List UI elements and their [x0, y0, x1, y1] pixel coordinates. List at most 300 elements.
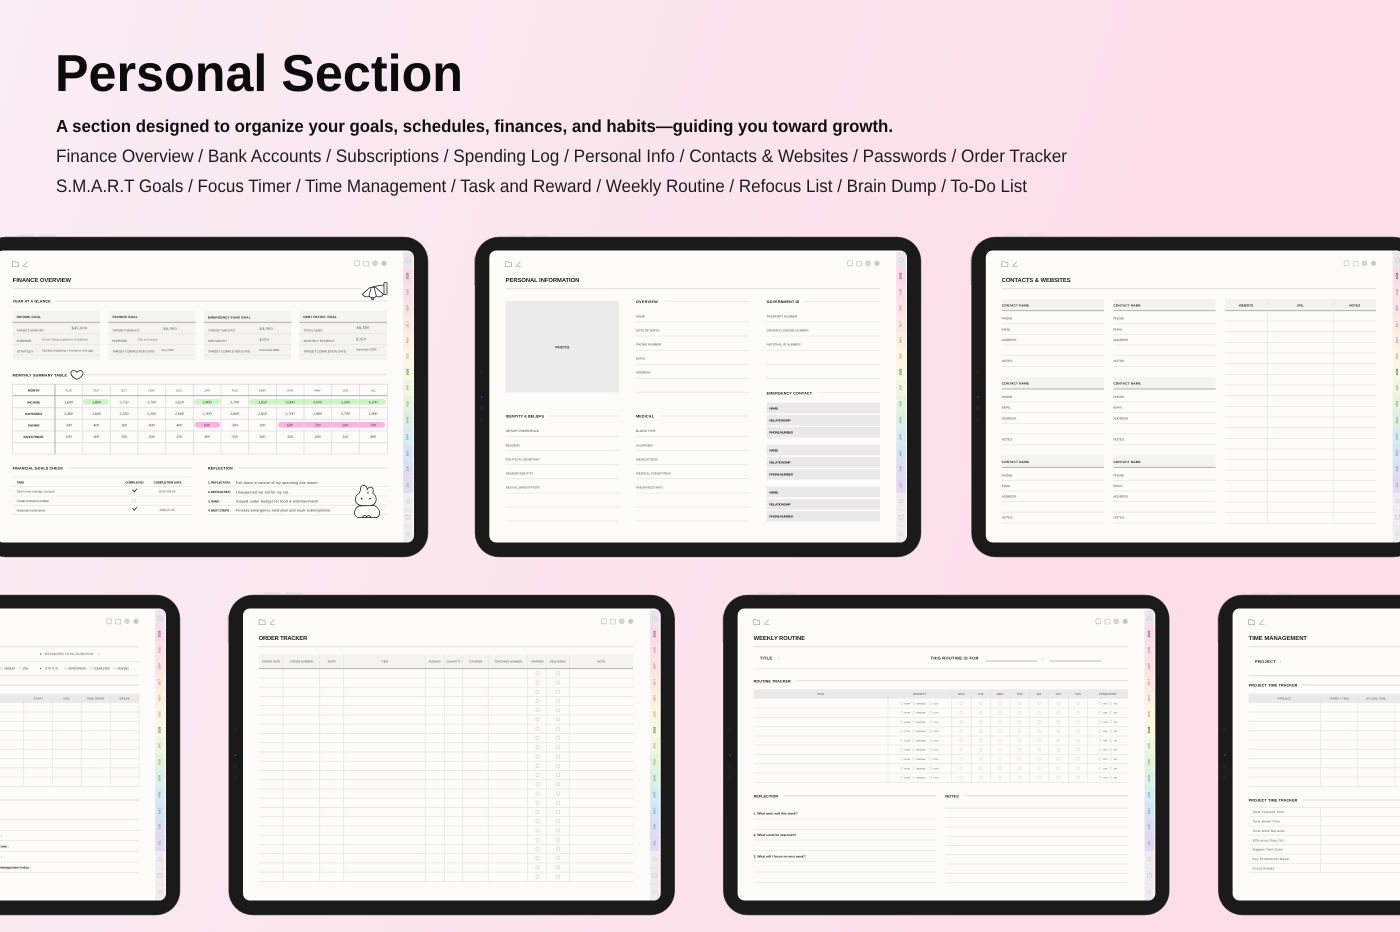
monthly summary table: 3,700: [147, 400, 156, 404]
monthly summary table: MONTH: [28, 389, 40, 393]
contact card 3: EMAIL: [1002, 406, 1011, 410]
routine tracker table: SUN: [1075, 692, 1081, 696]
contact card 6: CONTACT NAME: [1113, 460, 1141, 464]
card: income goal: Cover living expenses & hobbies: [42, 338, 88, 341]
monthly summary table: 350: [287, 434, 293, 439]
card: savings goal: SAVINGS GOAL: [112, 315, 138, 319]
routine tracker table: MON: [958, 692, 965, 696]
sidebar tab labels: MAR: [652, 774, 656, 781]
card: debt payoff goal: [299, 311, 387, 360]
contact card 5: [1002, 456, 1104, 523]
weekly routine page content: [754, 635, 1130, 883]
card: savings goal: $6,000: [163, 326, 177, 331]
contacts page content: [1002, 277, 1376, 523]
sidebar tab labels: NOV: [899, 337, 903, 343]
section: emergency contact: RELATIONSHIP: [769, 461, 791, 464]
reflection list: Stayed under budget for food & entertainment!: [236, 500, 318, 504]
order table: COURIER: [469, 660, 482, 663]
monthly summary table: 300: [259, 423, 265, 428]
device frame and sidebar tabs: [970, 235, 1400, 557]
monthly summary table: 300: [66, 423, 72, 428]
section heading: routine tracker: ROUTINE TRACKER: [754, 679, 791, 683]
section: emergency contact: [767, 391, 880, 522]
sidebar tab labels: APR: [1395, 433, 1399, 440]
sidebar tab labels: 2026: [899, 368, 903, 375]
summary metrics table: Total Focused Time: [1253, 810, 1284, 814]
routine tracker table: YES: [1103, 703, 1108, 705]
reflection list: Felt more in control of my spending this month.: [236, 481, 319, 485]
contact card 2: ADDRESS: [1113, 338, 1128, 342]
card: emergency fund goal: TARGET AMOUNT: [208, 329, 235, 332]
sidebar tab labels: FEB: [158, 759, 162, 765]
order table: ORDER NUMBER: [290, 660, 313, 663]
card: debt payoff goal: MONTHLY PAYMENT: [304, 339, 335, 343]
routine tracker table: TUE: [978, 692, 984, 696]
sidebar tab labels: OCT: [1147, 679, 1151, 685]
sidebar tab labels: FEB: [406, 401, 410, 407]
card: emergency fund goal: $4,000: [259, 326, 273, 331]
sidebar tab labels: JUL: [158, 840, 162, 846]
sidebar tab labels: JUN: [652, 824, 656, 830]
section heading: project time tracker summary: PROJECT TIME TRACKER: [1249, 798, 1297, 802]
sidebar tab labels: JUL: [1395, 482, 1399, 488]
contact card 2: EMAIL: [1113, 328, 1123, 331]
monthly summary table: 300: [232, 423, 238, 428]
order tracker page content: [259, 635, 633, 882]
monthly summary table: 200: [66, 434, 72, 439]
routine tracker table: NO: [1114, 721, 1117, 724]
device frame and sidebar tabs: [474, 235, 921, 557]
section: government id: GOVERNMENT ID: [767, 300, 799, 304]
routine tracker table: NO: [1114, 703, 1117, 705]
routine tracker table: NO: [1114, 749, 1117, 751]
section: emergency contact: NAME: [769, 491, 778, 494]
sidebar tab labels: DEC: [899, 352, 903, 359]
time log table: BREAK: [120, 697, 130, 700]
routine tracker table: MEDIUM: [917, 749, 925, 751]
monthly summary table: 3,850: [258, 400, 267, 404]
card: savings goal: July 2026: [161, 348, 174, 352]
order table: SHOP: [328, 660, 336, 663]
project field: PROJECT: [1255, 659, 1276, 664]
section: identity and beliefs: IDENTITY & BELIEFS: [506, 415, 544, 419]
routine tracker table: HIGH: [905, 703, 910, 705]
contact card 4: CONTACT NAME: [1113, 382, 1141, 386]
project time table: ACTUAL TIME: [1366, 697, 1386, 700]
section: reflection: 1. What went well this week?: [754, 812, 798, 816]
section heading: reflection: REFLECTION: [208, 467, 233, 471]
section: government id: [767, 300, 880, 378]
sidebar tab labels: DEC: [158, 710, 162, 717]
monthly summary table: 400: [315, 434, 321, 439]
monthly summary table: 400: [370, 434, 376, 439]
sidebar tab labels: OCT: [1395, 321, 1399, 327]
sidebar tab labels: OCT: [158, 679, 162, 685]
device frame and sidebar tabs: [0, 593, 180, 915]
order table: [259, 654, 633, 882]
monthly summary table: 2,400: [64, 411, 73, 416]
sidebar tab labels: SEP: [899, 305, 903, 311]
monthly summary table: 300: [93, 434, 99, 439]
section: identity and beliefs: SEXUAL ORIENTATION: [506, 486, 540, 490]
monthly summary table: JUN: [342, 389, 348, 392]
goals check table: 2025-08-03: [159, 490, 175, 493]
reflection list: 2. DIFFICULTIES :: [208, 490, 231, 494]
routine tracker table: YES: [1103, 749, 1108, 751]
monthly summary table: 600: [287, 423, 293, 428]
contact card 1: [1002, 299, 1104, 366]
summary metrics table: Total Work Duration: [1253, 829, 1285, 833]
reflection list: [208, 481, 387, 515]
sidebar tab labels: MAY: [1147, 808, 1151, 814]
sidebar tab labels: NOV: [652, 695, 656, 701]
routine tracker table: HIGH: [905, 712, 910, 714]
contact card 6: NOTES: [1113, 516, 1124, 520]
sidebar tab labels: MAY: [652, 808, 656, 814]
monthly summary table: APR: [287, 389, 293, 392]
section: reflection: 3. What will I focus on next week?: [754, 855, 806, 858]
monthly summary table: 2,600: [175, 411, 184, 416]
order table: SHIPPED: [531, 660, 544, 663]
sidebar tab labels: AUG: [652, 646, 656, 653]
priority and status options: LOW: [23, 667, 28, 670]
priority and status options: [0, 667, 139, 685]
section heading: project time tracker: PROJECT TIME TRACKER: [1249, 684, 1297, 688]
time log table: [0, 694, 139, 786]
routine tracker table: MEDIUM: [917, 758, 925, 761]
contact card 5: PHONE: [1002, 474, 1012, 477]
contact card 1: PHONE: [1002, 317, 1012, 321]
routine tracker table: HIGH: [905, 730, 910, 733]
card: income goal: $45,000: [72, 326, 87, 331]
sidebar tab labels: [899, 272, 903, 488]
card: emergency fund goal: EMERGENCY FUND GOAL: [208, 316, 251, 319]
monthly summary table: JAN: [204, 389, 210, 392]
monthly summary table: SAVING: [28, 424, 40, 428]
section: medical: MEDICATIONS: [636, 458, 658, 461]
monthly summary table: 300: [121, 423, 127, 428]
routine tracker table: YES: [1103, 712, 1108, 714]
page heading: PERSONAL INFORMATION: [506, 277, 579, 283]
sidebar tab labels: DEC: [1147, 710, 1151, 717]
device frame and sidebar tabs: [228, 593, 675, 915]
monthly summary table: 400: [176, 423, 182, 428]
section: emergency contact: RELATIONSHIP: [769, 503, 791, 506]
contact card 6: [1113, 456, 1216, 523]
sidebar tab labels: MAR: [406, 416, 410, 423]
routine tracker table: YES: [1103, 730, 1108, 733]
routine title and date range: THIS ROUTINE IS FOR: [931, 656, 978, 661]
goals check table: TASK: [17, 481, 24, 484]
order table: AMOUNT: [429, 660, 441, 663]
monthly summary table: 350: [232, 434, 238, 439]
routine tracker table: WED: [997, 692, 1003, 696]
contact card 3: [1002, 377, 1104, 445]
sidebar tab labels: JUN: [1395, 466, 1399, 472]
monthly summary table: FEB: [232, 389, 238, 392]
sidebar tab labels: DEC: [406, 352, 410, 359]
sidebar tab labels: [158, 630, 162, 846]
sidebar tab labels: OCT: [406, 321, 410, 327]
sidebar tab labels: AUG: [406, 288, 410, 295]
section heading: financial goals check: FINANCIAL GOALS CHECK: [13, 467, 63, 471]
websites table: [1225, 299, 1376, 523]
sidebar tab labels: 2025: [1395, 272, 1399, 279]
section: reflection: REFLECTION: [754, 794, 778, 798]
card: debt payoff goal: $8,500: [357, 325, 369, 330]
section: reflection: [754, 794, 936, 882]
monthly summary table: INCOME: [27, 401, 40, 404]
section: overview: ADDRESS: [636, 371, 651, 375]
reflection list: 4. NEXT STEPS :: [208, 509, 231, 512]
section: notes: NOTES: [945, 794, 959, 798]
contact card 5: ADDRESS: [1002, 495, 1016, 499]
sidebar tab labels: MAR: [1395, 416, 1399, 423]
sidebar tab labels: 2026: [406, 368, 410, 375]
contact card 4: NOTES: [1113, 438, 1124, 441]
monthly summary table: 3,650: [175, 400, 184, 404]
time log table: START: [34, 697, 43, 700]
sidebar tab labels: 2026: [158, 726, 162, 733]
page heading: CONTACTS & WEBSITES: [1002, 277, 1071, 283]
sidebar tab labels: JUL: [1147, 840, 1151, 846]
page heading: FINANCE OVERVIEW: [13, 277, 71, 283]
contact card 2: PHONE: [1113, 317, 1124, 321]
title: Personal Section: [55, 45, 463, 103]
section: notes: [945, 794, 1128, 883]
icon: wall lamp: [362, 283, 387, 300]
routine tracker table: NO: [1114, 768, 1117, 770]
section heading: monthly summary table: MONTHLY SUMMARY TABLE: [13, 373, 67, 377]
monthly summary table: 700: [315, 423, 321, 428]
project field: [1249, 659, 1400, 676]
section: emergency contact: PHONE NUMBER: [769, 473, 793, 476]
routine tracker table: MEDIUM: [917, 730, 925, 733]
sidebar tab labels: AUG: [158, 646, 162, 653]
project field: /: [1280, 660, 1281, 664]
sidebar tab labels: NOV: [1395, 337, 1399, 343]
sidebar tab labels: APR: [1147, 791, 1151, 798]
monthly summary table: JUL: [370, 389, 376, 392]
order table: NOTE: [597, 660, 605, 663]
project time table: TARGET TIME: [1329, 697, 1349, 700]
priority and status options: PENDING: [117, 667, 129, 670]
sidebar tab labels: MAY: [158, 808, 162, 814]
sidebar tab labels: MAY: [1395, 450, 1399, 456]
card: debt payoff goal: $350: [356, 337, 366, 342]
routine tracker table: NO: [1114, 740, 1117, 742]
sidebar tab labels: FEB: [1147, 759, 1151, 765]
card: savings goal: TARGET AMOUNT: [112, 329, 140, 332]
monthly summary table: NOV: [148, 389, 155, 392]
sidebar tab labels: JUL: [406, 482, 410, 488]
routine tracker table: [754, 689, 1130, 782]
section: emergency contact: PHONE NUMBER: [769, 431, 793, 434]
card: emergency fund goal: TARGET COMPLETION DATE: [208, 350, 250, 354]
sidebar tab labels: APR: [899, 433, 903, 440]
section: government id: DRIVER'S LICENSE NUMBER: [767, 329, 809, 333]
monthly summary table: 300: [259, 434, 265, 439]
section: medical: MEDICAL: [636, 415, 654, 419]
contact card 3: NOTES: [1002, 438, 1012, 441]
monthly summary table: 3,900: [285, 400, 294, 404]
contact card 3: PHONE: [1002, 395, 1012, 399]
monthly summary table: 350: [342, 434, 348, 439]
priority and status options: IN PROGRESS: [68, 667, 86, 670]
contact card 1: ADDRESS: [1002, 338, 1016, 342]
monthly summary table: AUG: [65, 389, 72, 392]
sidebar tab labels: JUN: [899, 466, 903, 472]
section: overview: PHONE NUMBER: [636, 343, 661, 347]
card: emergency fund goal: [204, 311, 291, 360]
goals check table: Open new savings account: [17, 490, 55, 493]
monthly summary table: 4,000: [313, 400, 322, 404]
time log table: END: [63, 697, 70, 700]
device frame: [1217, 593, 1400, 915]
section: overview: NAME: [636, 315, 645, 318]
contact card 2: CONTACT NAME: [1113, 304, 1141, 307]
estimated duration field: ESTIMATED TOTAL DURATION :: [45, 652, 95, 656]
routine tracker table: THU: [1017, 692, 1023, 696]
monthly summary table: DEC: [176, 389, 183, 392]
sidebar tab labels: FEB: [899, 401, 903, 407]
contact card 5: EMAIL: [1002, 484, 1011, 488]
contact card 1: CONTACT NAME: [1002, 304, 1029, 307]
priority and status options: STATUS:: [45, 667, 59, 670]
routine tracker table: PRIORITY: [913, 692, 926, 696]
routine tracker table: MEDIUM: [917, 703, 925, 705]
section: identity and beliefs: [506, 415, 619, 521]
sidebar tab labels: APR: [158, 791, 162, 798]
goals check table: COMPLETION DATE: [154, 481, 182, 484]
sidebar tab labels: 2026: [1395, 368, 1399, 375]
goals check table: 2025-07-26: [159, 508, 175, 512]
routine tracker table: TASK: [817, 692, 824, 696]
routine tracker table: LOW: [933, 758, 939, 761]
monthly summary table: 2,300: [202, 411, 211, 416]
card: debt payoff goal: September 2026: [356, 348, 377, 351]
routine tracker table: YES: [1103, 721, 1108, 724]
monthly summary table: [13, 384, 387, 454]
tablet: task planner, cropped at left: [0, 593, 180, 915]
summary metrics table: Key Productivity Boost: [1253, 857, 1289, 861]
monthly summary table: 2,600: [92, 411, 101, 416]
monthly summary table: 3,700: [230, 400, 239, 404]
monthly summary table: 3,600: [64, 400, 73, 404]
subtitle: A section designed to organize your goals, schedules, finances, and habits—guiding you toward growth.: [56, 116, 893, 136]
project time table: [1249, 694, 1400, 786]
time log table: TIME SPENT: [87, 697, 105, 700]
routine tracker table: MEDIUM: [917, 768, 925, 770]
project time table: PROJECT: [1278, 697, 1292, 700]
card: income goal: INCOME GOAL: [17, 315, 41, 319]
page heading: WEEKLY ROUTINE: [754, 635, 805, 641]
section: medical: INSURANCE INFO: [636, 486, 663, 490]
tablet: time management, cropped at right: [1217, 593, 1400, 915]
finance overview page content: [13, 277, 387, 518]
time management page content: [1249, 635, 1400, 873]
routine tracker table: COMPLETED: [1099, 692, 1116, 696]
contact card 5: CONTACT NAME: [1002, 460, 1029, 464]
tablet: contacts and websites: [970, 235, 1400, 557]
monthly summary table: 400: [149, 423, 155, 428]
sidebar tab labels: 2025: [406, 272, 410, 279]
sidebar tab labels: SEP: [1395, 305, 1399, 311]
routine tracker table: NO: [1114, 777, 1117, 779]
device frame and sidebar tabs: [0, 235, 428, 557]
routine tracker table: YES: [1103, 777, 1108, 779]
routine tracker table: YES: [1103, 740, 1108, 742]
icon: heart: [71, 371, 83, 379]
card: savings goal: Trip to Europe: [138, 338, 158, 341]
radio buttons: [897, 699, 1130, 782]
goals check table: [13, 477, 192, 515]
contact card 2: [1113, 299, 1216, 366]
monthly summary table: MAR: [259, 389, 266, 392]
sidebar tab labels: NOV: [406, 337, 410, 343]
routine title and date range: [754, 656, 1128, 669]
sidebar tab labels: AUG: [1147, 646, 1151, 653]
monthly summary table: INVESTMENT: [23, 435, 44, 439]
section: medical: BLOOD TYPE: [636, 429, 656, 433]
sidebar tab labels: JAN: [1147, 743, 1151, 749]
sidebar tab labels: JUN: [406, 466, 410, 472]
routine tracker table: HIGH: [905, 749, 910, 751]
section: reflection: 2. What could be improved?: [754, 833, 796, 837]
routine tracker table: LOW: [933, 730, 939, 733]
photo placeholder: PHOTO: [555, 346, 569, 350]
monthly summary table: 2,650: [258, 411, 267, 416]
section: emergency contact: EMERGENCY CONTACT: [767, 391, 812, 395]
card: income goal: TARGET AMOUNT: [17, 329, 44, 332]
sidebar tab labels: NOV: [158, 695, 162, 701]
sidebar tab labels: JAN: [1395, 385, 1399, 391]
reflection list: Unexpected vet bill for my cat.: [236, 490, 289, 494]
contact card 4: [1113, 377, 1216, 445]
contact card 1: NOTES: [1002, 359, 1012, 363]
order table: ORDER DATE: [262, 660, 280, 663]
sidebar tab labels: JAN: [158, 743, 162, 749]
sidebar tab labels: [1147, 630, 1151, 846]
section: identity and beliefs: POLITICAL VIEWPOINT: [506, 458, 540, 461]
contact card 6: PHONE: [1113, 474, 1124, 477]
contact card 2: NOTES: [1113, 359, 1124, 363]
sidebar tab labels: DEC: [1395, 352, 1399, 359]
card: debt payoff goal: TARGET COMPLETION DATE: [304, 350, 346, 354]
card: debt payoff goal: DEBT PAYOFF GOAL: [303, 315, 337, 319]
icon: bunny mascot: [355, 485, 380, 518]
summary metrics table: [1249, 807, 1400, 873]
reflection list: Finalize emergency fund plan and track subscriptions.: [236, 509, 331, 513]
routine tracker table: HIGH: [905, 777, 910, 779]
sidebar tab labels: SEP: [1147, 663, 1151, 669]
order table: TRACKING NUMBER: [494, 660, 522, 663]
card: savings goal: TARGET COMPLETION DATE: [112, 350, 155, 354]
sidebar tab labels: APR: [406, 433, 410, 440]
monthly summary table: 600: [342, 423, 348, 428]
contact card 1: EMAIL: [1002, 328, 1011, 331]
sidebar tab labels: 2026: [1147, 726, 1151, 733]
websites table: WEBSITE: [1239, 304, 1253, 307]
reflection prompts: [0, 800, 139, 873]
sidebar tab labels: AUG: [1395, 288, 1399, 295]
sidebar tab labels: 2026: [652, 726, 656, 733]
websites table: NOTES: [1349, 304, 1360, 307]
section: government id: PASSPORT NUMBER: [767, 315, 797, 318]
sidebar tab labels: OCT: [652, 679, 656, 685]
shipped and delivered checkboxes: [536, 669, 560, 881]
sidebar tab labels: 2025: [899, 272, 903, 279]
